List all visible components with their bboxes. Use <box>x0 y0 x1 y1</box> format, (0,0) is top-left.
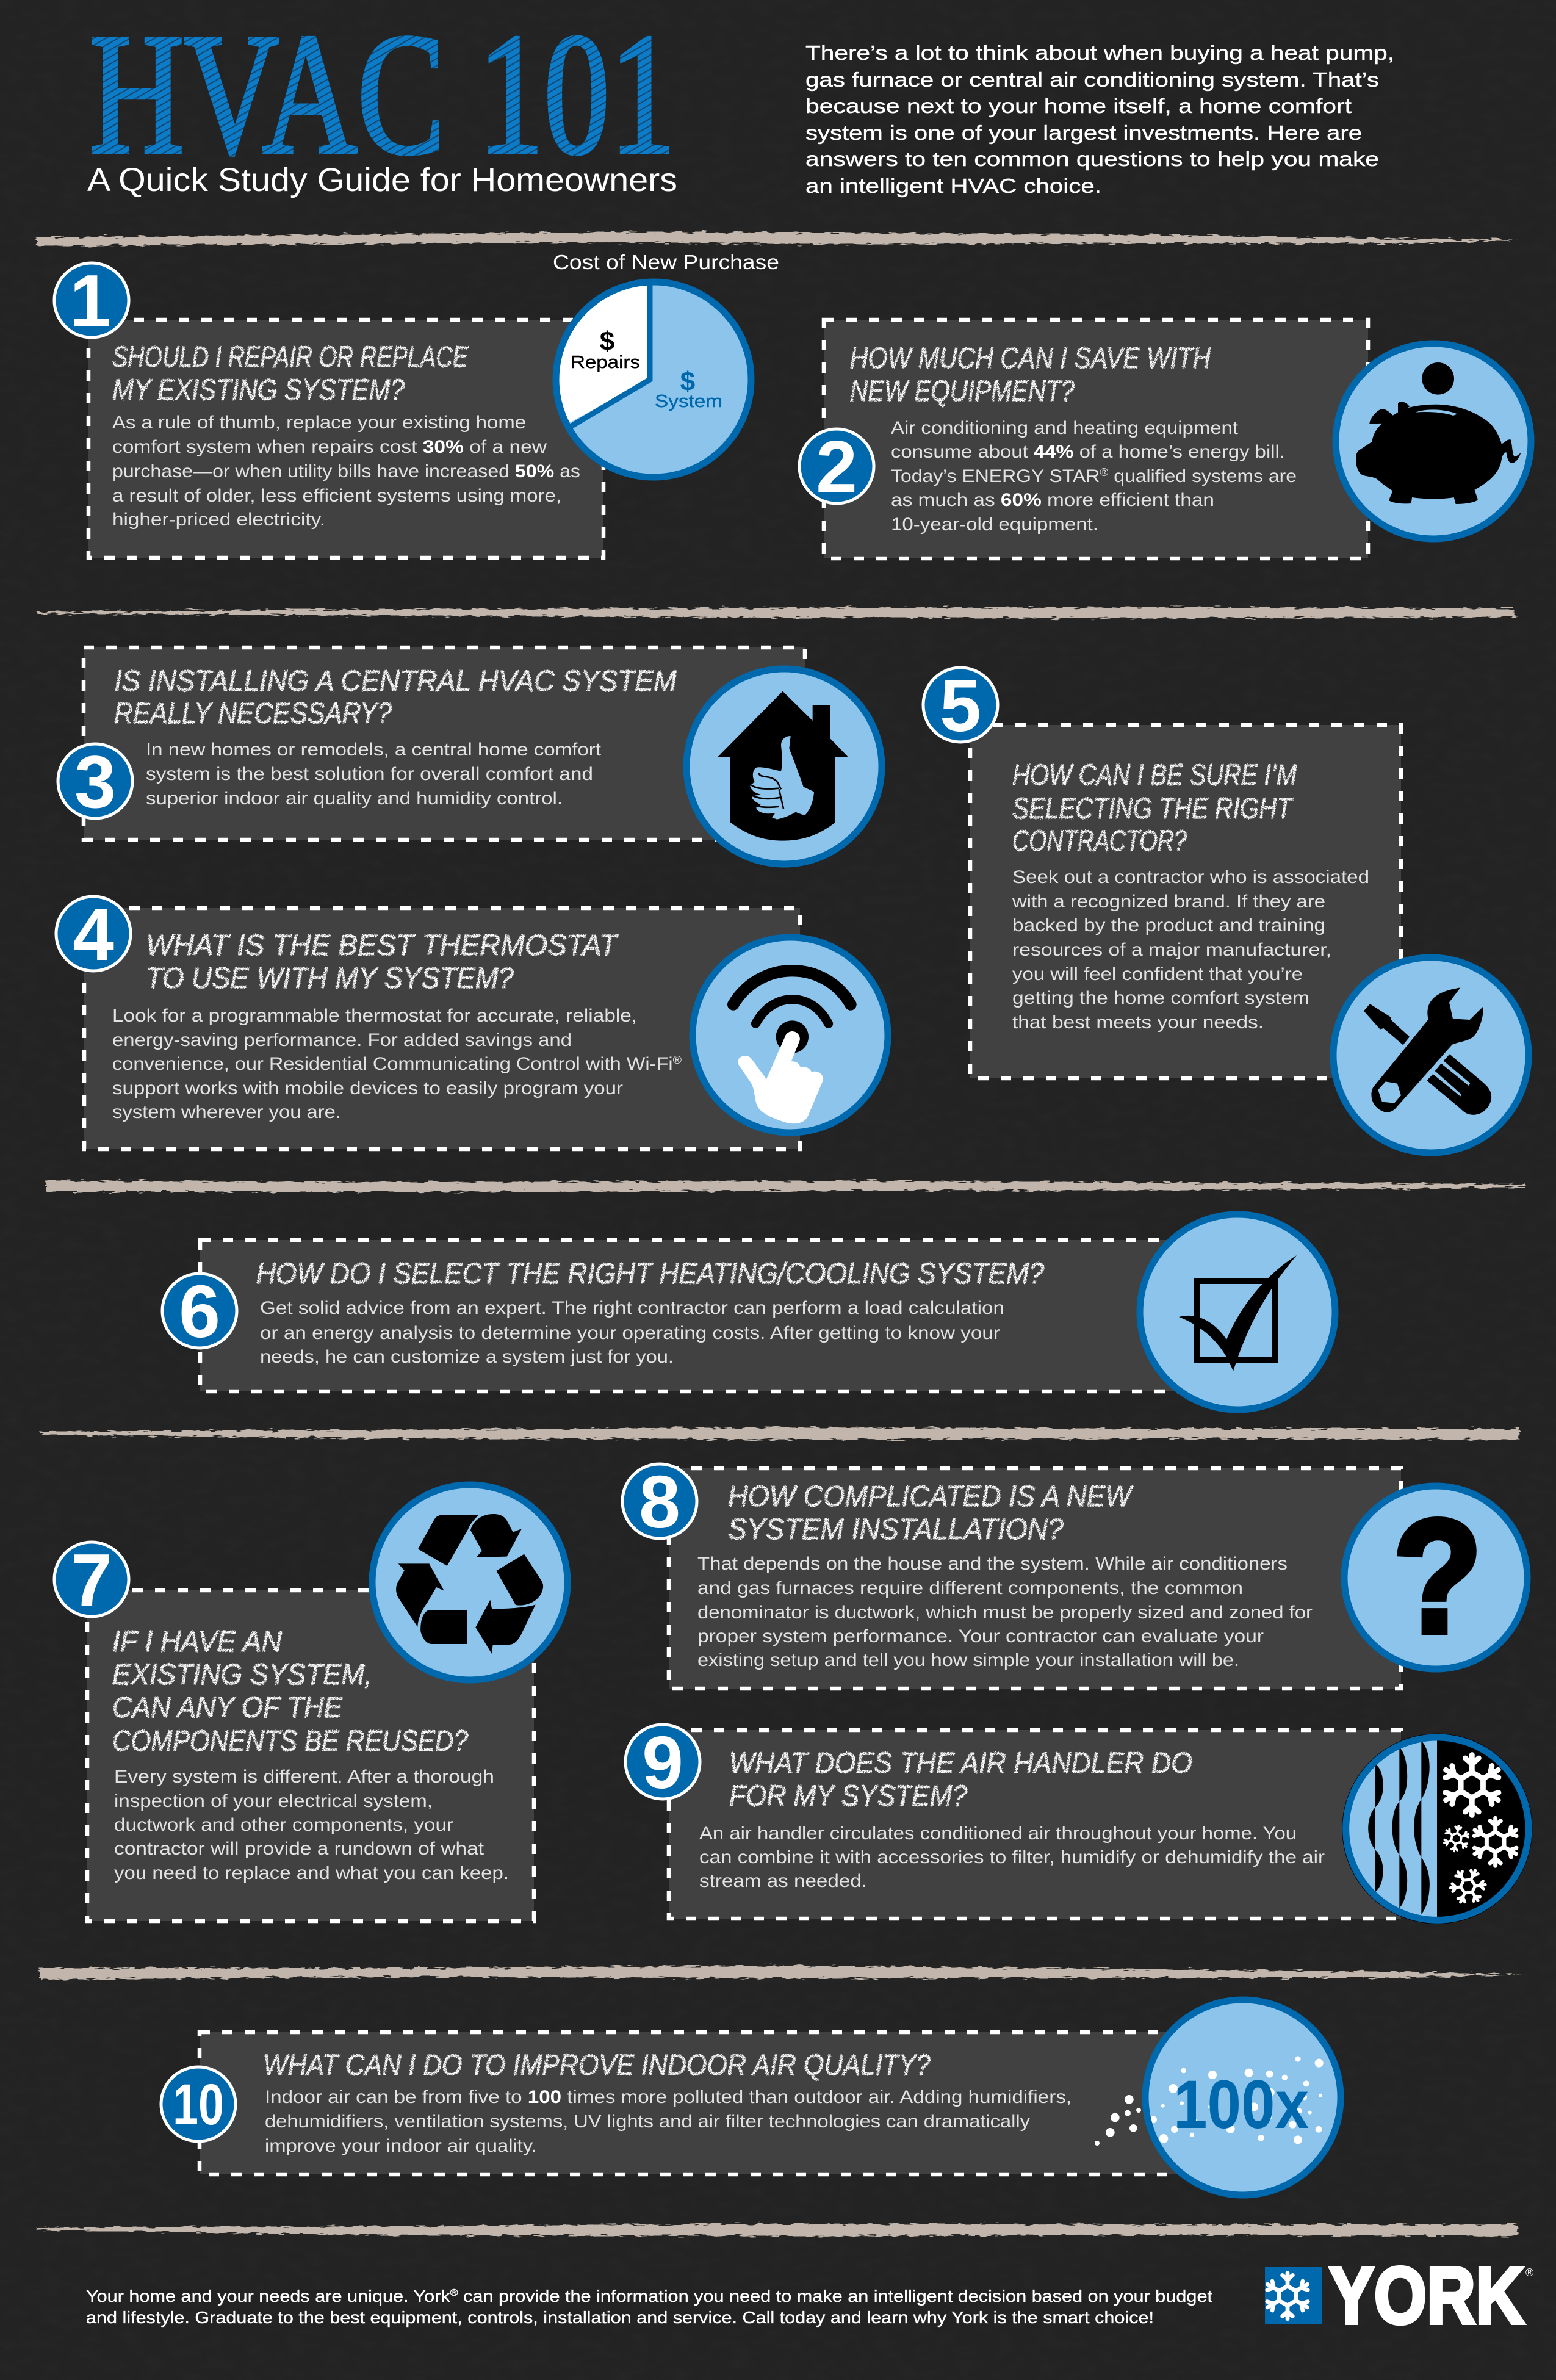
body text 1 <box>112 413 580 530</box>
panel: question 10 <box>161 2000 1341 2195</box>
heading 9: WHAT DOES THE AIR HANDLER DO <box>729 1747 1192 1780</box>
system slice label: $ <box>680 367 695 397</box>
badge 2: 2 <box>816 425 857 508</box>
divider 6 <box>37 2224 1518 2236</box>
panel: question 8 <box>622 1460 1527 1689</box>
heading 4: WHAT IS THE BEST THERMOSTAT <box>146 929 619 962</box>
body text 6: needs, he can customize a system just for you. <box>260 1347 674 1367</box>
pie title: Cost of New Purchase <box>553 251 779 273</box>
title: HVAC 101 <box>89 0 675 190</box>
system slice label: System <box>655 392 722 411</box>
intro text: gas furnace or central air conditioning system. That’s <box>805 68 1379 91</box>
body text 5: resources of a major manufacturer, <box>1012 940 1331 960</box>
body text 4: system wherever you are. <box>112 1102 341 1122</box>
body text 3: system is the best solution for overall comfort and <box>146 764 593 784</box>
subtitle: A Quick Study Guide for Homeowners <box>87 162 677 198</box>
body text 4: Look for a programmable thermostat for accurate, reliable, <box>112 1006 637 1026</box>
panel: question 9 <box>625 1721 1535 1924</box>
badge 8 <box>622 1460 697 1543</box>
heading 5 <box>1012 759 1297 857</box>
badge 9 <box>625 1721 700 1804</box>
body text 8 <box>697 1554 1313 1670</box>
body text 5: backed by the product and training <box>1012 915 1325 936</box>
body text 4: ® <box>673 1054 682 1066</box>
body text 5: that best meets your needs. <box>1012 1012 1264 1033</box>
badge 2 <box>799 425 874 508</box>
intro text <box>805 41 1394 197</box>
body text 7: you need to replace and what you can keep. <box>114 1863 509 1883</box>
intro text: answers to ten common questions to help you make <box>805 148 1379 170</box>
system slice label <box>655 367 722 411</box>
heading 4: TO USE WITH MY SYSTEM? <box>146 962 514 995</box>
icon: 100x particles <box>1095 2000 1341 2195</box>
footer text <box>86 2287 1212 2327</box>
body text 9 <box>699 1823 1325 1891</box>
panel: question 5 <box>923 664 1529 1153</box>
body text 10 <box>265 2087 1072 2156</box>
pie chart: cost of new purchase <box>537 251 779 477</box>
divider 3 <box>46 1181 1525 1192</box>
heading 3: IS INSTALLING A CENTRAL HVAC SYSTEM <box>114 665 677 698</box>
body text 4: support works with mobile devices to easily program your <box>112 1078 623 1098</box>
body text 2: Air conditioning and heating equipment <box>891 418 1239 438</box>
body text 8: and gas furnaces require different components, the common <box>697 1578 1243 1598</box>
body text 3 <box>146 740 602 809</box>
heading 6: HOW DO I SELECT THE RIGHT HEATING/COOLING SYSTEM? <box>256 1258 1044 1290</box>
heading 2 <box>850 342 1211 408</box>
heading 1: SHOULD I REPAIR OR REPLACE <box>112 341 469 373</box>
badge 10: 10 <box>173 2072 224 2137</box>
body text 10: improve your indoor air quality. <box>265 2136 537 2156</box>
body text 3: In new homes or remodels, a central home comfort <box>146 740 602 760</box>
divider 5 <box>40 1966 1524 1980</box>
heading 3 <box>114 665 677 730</box>
body text 7: Every system is different. After a thorough <box>114 1767 494 1787</box>
intro text: an intelligent HVAC choice. <box>805 175 1101 197</box>
icon: piggy bank <box>1336 344 1531 539</box>
body text 4: energy-saving performance. For added savings and <box>112 1030 572 1050</box>
heading 2: NEW EQUIPMENT? <box>850 375 1075 408</box>
logo: York: ® <box>1525 2266 1533 2279</box>
panel: question 2 <box>799 320 1531 558</box>
body text 1: higher-priced electricity. <box>112 510 325 530</box>
badge 4: 4 <box>73 893 114 976</box>
body text 5: getting the home comfort system <box>1012 988 1309 1008</box>
body text 7: ductwork and other components, your <box>114 1815 453 1835</box>
body text 5: Seek out a contractor who is associated <box>1012 867 1369 887</box>
intro text: because next to your home itself, a home comfort <box>805 95 1352 117</box>
panel: question 6 <box>162 1214 1335 1410</box>
heading 10: WHAT CAN I DO TO IMPROVE INDOOR AIR QUALITY? <box>263 2049 931 2082</box>
badge 3 <box>58 740 132 823</box>
repairs slice label: $ <box>600 326 614 356</box>
logo: York: YORK <box>1329 2251 1524 2340</box>
badge 1 <box>54 259 129 342</box>
badge 4 <box>56 893 131 976</box>
repairs slice label: Repairs <box>571 353 640 372</box>
icon: checkbox <box>1140 1214 1335 1410</box>
body text 2: Today’s ENERGY STAR <box>891 466 1087 486</box>
body text 5: with a recognized brand. If they are <box>1012 892 1325 912</box>
footer text: Your home and your needs are unique. York <box>86 2287 419 2306</box>
body text 2: qualified systems are <box>1108 466 1297 486</box>
heading 7: CAN ANY OF THE <box>112 1692 343 1724</box>
body text 4 <box>112 1006 682 1122</box>
heading 2: HOW MUCH CAN I SAVE WITH <box>850 342 1211 375</box>
body text 5 <box>1012 867 1369 1033</box>
icon: house with thumbs up <box>686 669 882 864</box>
heading 4 <box>146 929 619 995</box>
heading 3: REALLY NECESSARY? <box>114 698 392 730</box>
badge 7: 7 <box>71 1538 112 1621</box>
body text 1: a result of older, less efficient systems using more, <box>112 486 561 506</box>
heading 5: SELECTING THE RIGHT <box>1012 793 1294 825</box>
body text 8: That depends on the house and the system. While air conditioners <box>697 1554 1288 1574</box>
badge 6 <box>162 1270 237 1353</box>
body text 4: convenience, our Residential Communicating Control with Wi-Fi <box>112 1054 629 1074</box>
panel: question 7 <box>54 1485 567 1921</box>
body text 2: consume about 44% of a home’s energy bill. <box>891 442 1285 462</box>
heading 8: SYSTEM INSTALLATION? <box>728 1513 1064 1546</box>
heading 7: EXISTING SYSTEM, <box>112 1659 372 1691</box>
body text 9: can combine it with accessories to filter, humidify or dehumidify the air <box>699 1847 1325 1867</box>
badge 1: 1 <box>70 259 111 342</box>
body text 6: Get solid advice from an expert. The right contractor can perform a load calculation <box>260 1298 1004 1318</box>
body text 3: superior indoor air quality and humidity control. <box>146 788 563 809</box>
icon: wrench and screwdriver <box>1333 957 1529 1153</box>
heading 7: COMPONENTS BE REUSED? <box>112 1725 468 1758</box>
body text 10: dehumidifiers, ventilation systems, UV lights and air filter technologies can dramatically <box>265 2111 1030 2132</box>
heading 5: CONTRACTOR? <box>1012 825 1187 857</box>
panel: question 3 <box>58 647 882 864</box>
body text 10: Indoor air can be from five to 100 times more polluted than outdoor air. Adding humidifiers, <box>265 2087 1072 2107</box>
footer text: and lifestyle. Graduate to the best equipment, controls, installation and service. Call today and learn why York is the smart choice! <box>86 2308 1154 2327</box>
heading 8: HOW COMPLICATED IS A NEW <box>728 1480 1134 1513</box>
header <box>87 0 1394 198</box>
body text 6 <box>260 1298 1004 1367</box>
badge 9: 9 <box>642 1721 683 1804</box>
body text 8: existing setup and tell you how simple your installation will be. <box>697 1650 1239 1670</box>
body text 7: contractor will provide a rundown of what <box>114 1839 484 1859</box>
body text 2: ® <box>1100 466 1108 478</box>
body text 5: you will feel confident that you’re <box>1012 964 1303 984</box>
intro text: There’s a lot to think about when buying a heat pump, <box>805 41 1394 64</box>
body text 8: denominator is ductwork, which must be properly sized and zoned for <box>697 1603 1313 1623</box>
body text 2: as much as 60% more efficient than <box>891 490 1214 510</box>
body text 7: inspection of your electrical system, <box>114 1791 433 1811</box>
body text 2: 10-year-old equipment. <box>891 514 1098 535</box>
heading 8 <box>728 1480 1134 1546</box>
badge 5 <box>923 664 998 747</box>
heading 7: IF I HAVE AN <box>112 1626 282 1658</box>
badge 5: 5 <box>940 664 981 747</box>
icon: question mark <box>1344 1486 1527 1669</box>
panel: question 1 <box>54 251 779 558</box>
body text 7 <box>114 1767 509 1883</box>
badge 6: 6 <box>179 1270 220 1353</box>
repairs slice label <box>571 326 640 372</box>
footer text: ® <box>450 2288 458 2298</box>
icon: 100x particles: 100x <box>1173 2066 1309 2143</box>
heading 7 <box>112 1626 468 1758</box>
icon: question mark: ? <box>1393 1487 1482 1667</box>
body text 2 <box>891 418 1297 535</box>
footer text: can provide the information you need to make an intelligent decision based on your budget <box>458 2287 1212 2306</box>
badge 3: 3 <box>74 740 116 823</box>
icon: touch wifi <box>693 937 888 1133</box>
divider 1 <box>37 232 1519 246</box>
badge 7 <box>54 1538 129 1621</box>
heading 1: MY EXISTING SYSTEM? <box>112 374 405 406</box>
body text 9: stream as needed. <box>699 1871 867 1891</box>
icon: air and snowflakes <box>1342 1733 1535 1924</box>
body text 1: As a rule of thumb, replace your existing home <box>112 413 526 433</box>
panel: question 4 <box>56 893 888 1149</box>
body text 6: or an energy analysis to determine your operating costs. After getting to know your <box>260 1323 1000 1343</box>
body text 1: comfort system when repairs cost 30% of a new <box>112 437 547 457</box>
divider 4 <box>40 1427 1519 1440</box>
heading 9: FOR MY SYSTEM? <box>729 1780 967 1812</box>
heading 9 <box>729 1747 1192 1812</box>
intro text: system is one of your largest investments. Here are <box>805 121 1362 144</box>
heading 1 <box>112 341 469 406</box>
divider 2 <box>37 607 1516 618</box>
heading 5: HOW CAN I BE SURE I’M <box>1012 759 1297 792</box>
icon: recycle <box>372 1485 567 1680</box>
body text 1: purchase—or when utility bills have increased 50% as <box>112 461 580 481</box>
body text 8: proper system performance. Your contractor can evaluate your <box>697 1626 1264 1646</box>
badge 8: 8 <box>639 1460 680 1543</box>
body text 9: An air handler circulates conditioned air throughout your home. You <box>699 1823 1297 1844</box>
